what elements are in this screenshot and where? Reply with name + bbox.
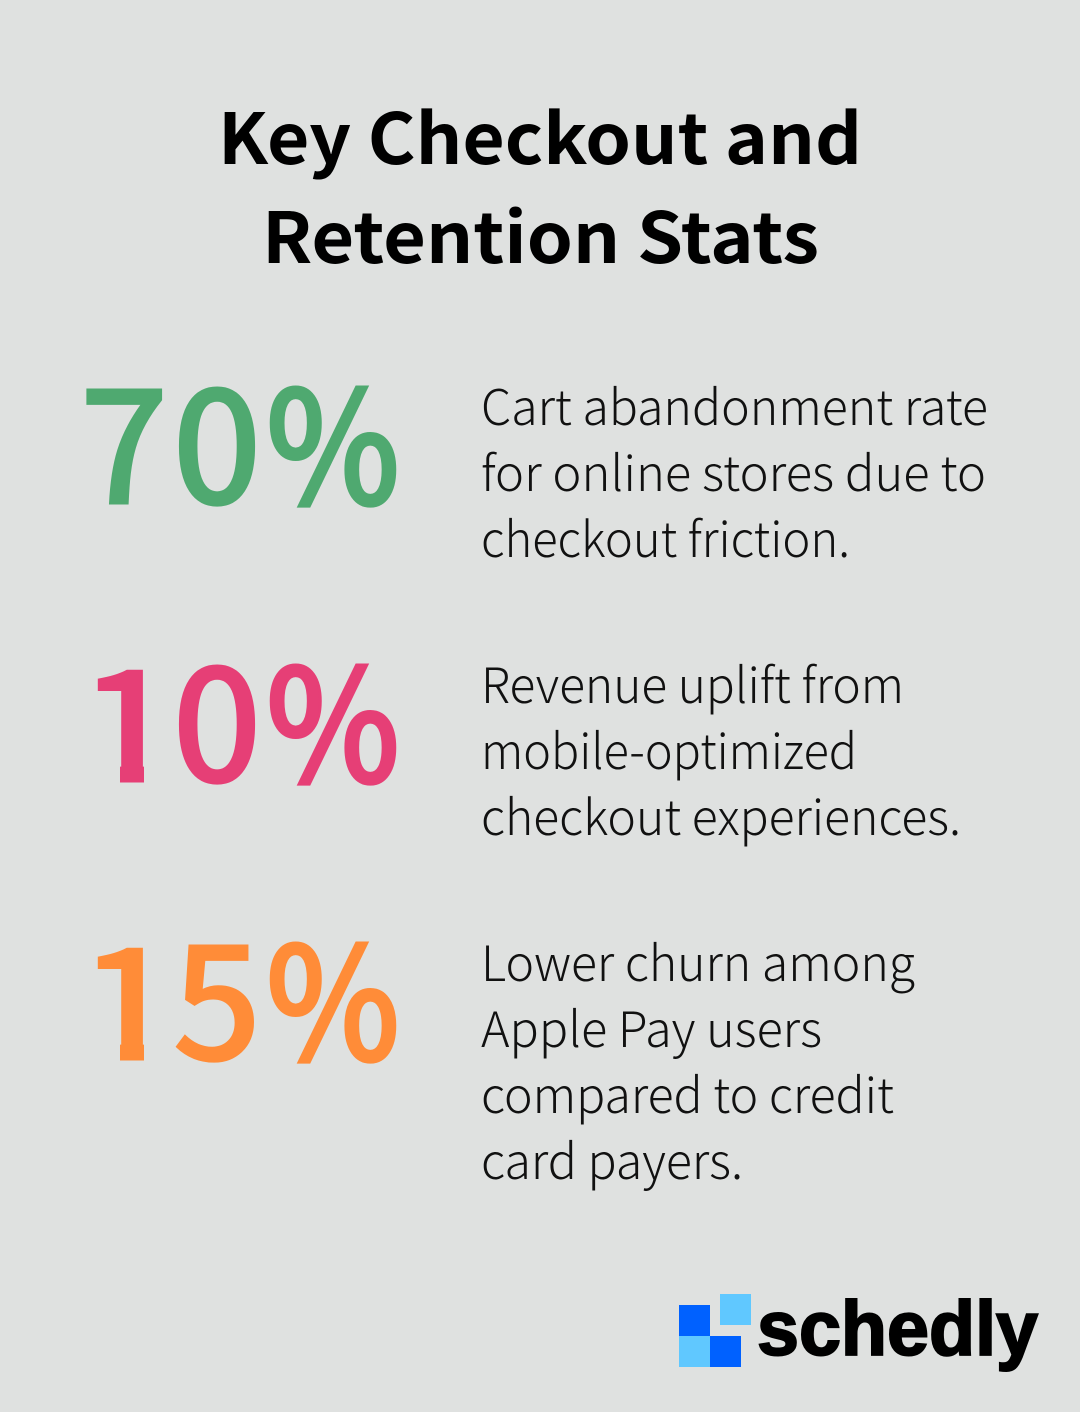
big number: 15%: % bbox=[266, 879, 400, 1105]
big number: 10%: 1 bbox=[78, 601, 179, 827]
big number: 70%: 7 bbox=[79, 323, 169, 549]
logo wordmark: schedly bbox=[757, 1286, 1038, 1372]
logo: schedly bbox=[679, 1286, 1038, 1372]
big number: 10%: % bbox=[266, 601, 400, 827]
title: Key Checkout and bbox=[218, 84, 862, 185]
description: revenue uplift: mobile-optimized bbox=[481, 713, 857, 784]
description: lower churn: Lower churn among bbox=[481, 925, 915, 996]
description: cart abandonment bbox=[481, 369, 988, 572]
description: lower churn: card payers. bbox=[481, 1123, 743, 1194]
description: lower churn: compared to credit bbox=[481, 1057, 894, 1128]
big number: 15%: 1 bbox=[78, 879, 179, 1105]
title bbox=[218, 84, 862, 284]
description: revenue uplift: checkout experiences. bbox=[481, 779, 961, 850]
stat row: 70% bbox=[79, 323, 988, 572]
description: lower churn: Apple Pay users bbox=[481, 991, 822, 1062]
big number: 70%: % bbox=[266, 323, 400, 549]
description: cart abandonment: Cart abandonment rate bbox=[481, 369, 988, 440]
big number: 15% bbox=[98, 942, 396, 1064]
description: cart abandonment: for online stores due to bbox=[481, 435, 986, 506]
big number: 10% bbox=[98, 664, 396, 786]
icon: logo squares bbox=[679, 1294, 751, 1367]
title: Retention Stats bbox=[262, 183, 819, 284]
stat row: 15% bbox=[98, 942, 914, 1191]
description: revenue uplift bbox=[481, 647, 961, 850]
description: cart abandonment: checkout friction. bbox=[481, 501, 850, 572]
big number: 10%: 0 bbox=[172, 601, 262, 827]
stat row: 10% bbox=[98, 664, 958, 846]
description: lower churn bbox=[481, 925, 915, 1194]
big number: 15%: 5 bbox=[172, 879, 262, 1105]
description: revenue uplift: Revenue uplift from bbox=[481, 647, 904, 718]
big number: 70%: 0 bbox=[172, 323, 262, 549]
